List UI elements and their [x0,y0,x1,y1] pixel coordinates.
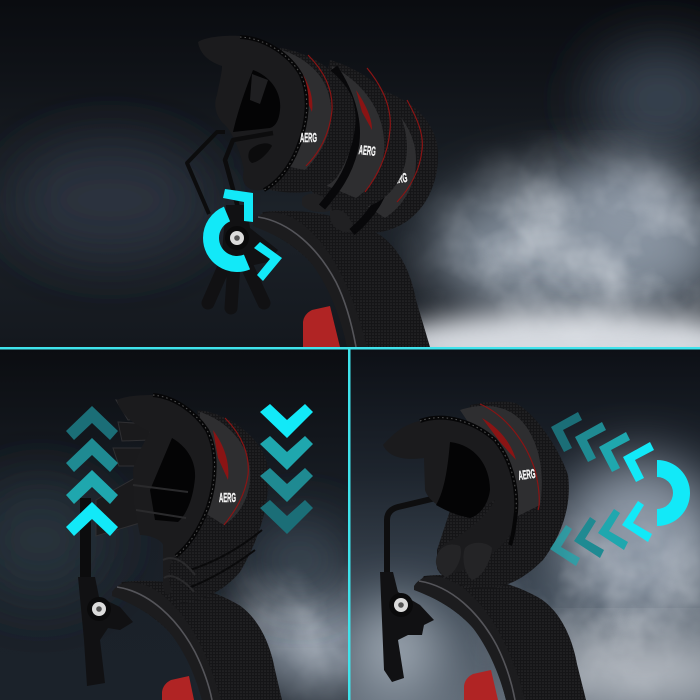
panel: top full-width tilt view [0,20,700,347]
adjustment levers fanned [208,262,264,308]
pivot bolt [230,226,244,250]
arrows: lower tilt chevrons [550,501,652,566]
stacked height positions behind headrest [96,400,150,536]
headrest middle pad [312,60,407,210]
background: smoky sky [350,349,700,700]
headrest pad side [437,402,569,588]
headrest pad side: AERG [517,466,536,483]
support arm [387,497,440,572]
chair back with mesh and red bracket [112,581,282,700]
background: smoky sky [0,426,348,700]
logo badge: AERG [388,170,408,187]
headrest front pad and face: AERG [300,130,317,145]
headrest front pad and face [198,36,356,193]
pivot bolt [92,597,108,621]
icon: cyan rotation arc [211,214,247,264]
background: dark smoky sky [0,20,700,347]
headrest pad side [163,410,268,603]
arrow: cyan upper chevron [223,189,253,222]
support arm [80,498,91,578]
clamp and lever [78,577,133,686]
panel: lower-right tilt view [350,349,700,700]
panel: lower-left height adjustment view [0,393,348,700]
icon: cyan half-ring arc [657,460,690,526]
clamp and lever [380,572,434,682]
headrest rear pad [330,88,438,233]
arrows: down chevrons [260,404,313,534]
headrest face [383,417,518,580]
horizontal cyan divider [0,347,700,350]
arrows: up chevrons [66,406,118,536]
chair back with mesh and red bracket [253,211,430,347]
arrows: upper tilt chevrons [551,412,654,482]
pivot bolt [394,593,412,617]
bracket arms [187,132,273,215]
headrest face [117,395,215,595]
arrow: cyan lower chevron [254,242,282,281]
headrest pad side: AERG [219,490,236,505]
vertical cyan divider [348,349,350,700]
clamp body [222,205,278,268]
chair back with mesh and red bracket [414,575,586,700]
headrest middle pad: AERG [358,142,377,159]
